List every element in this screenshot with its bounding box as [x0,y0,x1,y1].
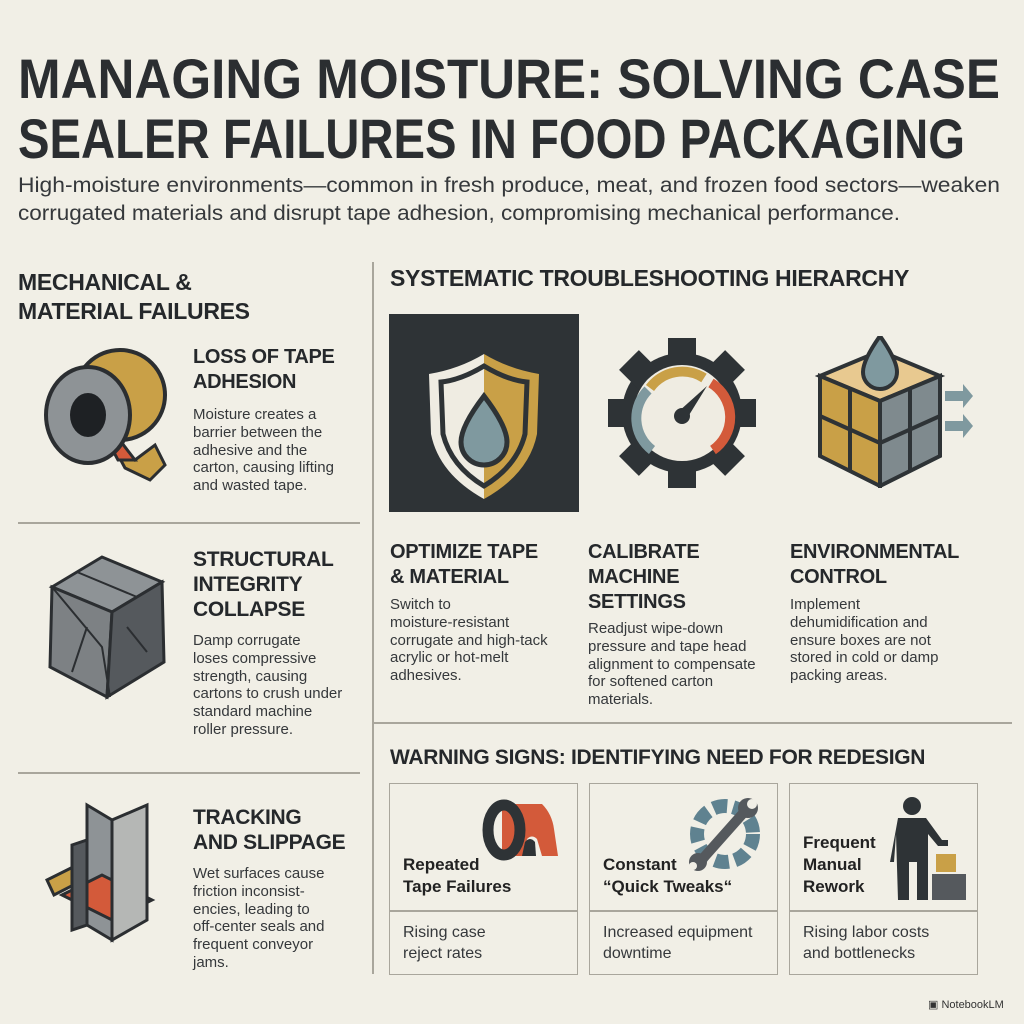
text: structural integrity collapse: roller pressure. [193,721,293,738]
heading: loss of tape adhesion [193,346,335,393]
text: card detail [403,924,486,962]
icon: tracking slippage [45,802,156,943]
icon: shield with drop [389,314,579,512]
text: card title [403,855,511,896]
text: loss of tape adhesion: and wasted tape. [193,477,307,494]
heading: structural integrity collapse: STRUCTURAL [193,548,333,571]
text: optimize tape: Switch to [390,596,451,613]
text: card detail: downtime [603,945,671,962]
text: calibrate: alignment to compensate [588,656,756,673]
heading: systematic troubleshooting hierarchy: SYSTEMATIC TROUBLESHOOTING HIERARCHY [390,265,909,291]
heading: loss of tape adhesion: LOSS OF TAPE [193,346,335,368]
text: card title [603,855,732,896]
text: card title [803,833,876,896]
heading: tracking and slippage [193,806,345,854]
heading: calibrate machine settings: MACHINE [588,566,679,588]
icon: tape roll [44,348,167,482]
text: environmental control: ensure boxes are not [790,632,931,649]
text: environmental control: packing areas. [790,667,888,684]
text: card title: Frequent [803,833,876,852]
heading: calibrate machine settings: CALIBRATE [588,541,699,563]
heading: optimize tape & material: OPTIMIZE TAPE [390,541,538,563]
text: structural integrity collapse: standard machine [193,703,312,720]
text: environmental control: stored in cold or damp [790,649,938,666]
icon: crushed box [48,555,166,700]
title [18,47,1000,170]
icon: cube with drop and arrows [815,336,973,488]
heading: environmental control [790,541,959,588]
text: optimize tape: acrylic or hot-melt [390,649,508,666]
text: card detail [803,924,929,962]
icon: tape roll red [482,800,558,860]
heading: calibrate machine settings [588,541,699,613]
text: loss of tape adhesion: adhesive and the [193,442,307,459]
subtitle [18,173,1000,225]
text: environmental control: dehumidification and [790,614,928,631]
heading: loss of tape adhesion: ADHESION [193,371,296,393]
text: tracking and slippage: off-center seals and [193,918,324,935]
text: card detail: reject rates [403,945,482,962]
text: structural integrity collapse: Damp corrugate [193,632,301,649]
subtitle: High-moisture environments—common in fresh produce, meat, and frozen food sectors—weaken [18,173,1000,197]
text: tracking and slippage [192,865,324,971]
text: optimize tape: moisture-resistant [390,614,509,631]
heading: warning signs: WARNING SIGNS: IDENTIFYING NEED FOR REDESIGN [390,746,925,769]
text: card detail: Increased equipment [603,924,752,941]
heading: mechanical & material failures [18,269,250,324]
text: structural integrity collapse: loses compressive [193,650,316,667]
text: loss of tape adhesion: barrier between the [193,424,322,441]
icon: gear and wrench [689,798,760,871]
text: card title: Rework [803,877,864,896]
text: environmental control [790,596,938,684]
card: frequent manual rework [789,783,978,975]
card: constant quick tweaks [589,783,778,975]
text: loss of tape adhesion: Moisture creates a [193,406,316,423]
text: tracking and slippage: frequent conveyor [193,936,313,953]
text: loss of tape adhesion: carton, causing lifting [193,459,334,476]
heading: environmental control: CONTROL [790,566,887,588]
text: calibrate: for softened carton [588,673,713,690]
text: tracking and slippage: Wet surfaces cause [193,865,324,882]
text: tracking and slippage: friction inconsist- [193,883,305,900]
heading: mechanical & material failures: MATERIAL FAILURES [18,298,250,324]
card: repeated tape failures [389,783,578,975]
heading: optimize tape & material: & MATERIAL [390,566,509,588]
text: card detail: and bottlenecks [803,945,915,962]
text: calibrate: materials. [588,691,653,708]
text: loss of tape adhesion [193,406,334,494]
heading: tracking and slippage: AND SLIPPAGE [193,831,345,854]
text: optimize tape: corrugate and high-tack [390,632,548,649]
text: calibrate [588,620,756,708]
text: card title: Manual [803,855,862,874]
text: card detail: Rising labor costs [803,924,929,941]
text: environmental control: Implement [790,596,860,613]
text: optimize tape [390,596,548,684]
text: card detail [603,924,752,962]
heading: structural integrity collapse: INTEGRITY [193,573,302,596]
text: tracking and slippage: jams. [193,954,229,971]
heading: tracking and slippage: TRACKING [193,806,301,829]
watermark: ▣ NotebookLM [928,999,1004,1011]
heading: environmental control: ENVIRONMENTAL [790,541,959,563]
heading: structural integrity collapse: COLLAPSE [193,598,305,621]
heading: optimize tape & material [390,541,538,588]
text: calibrate: Readjust wipe-down [588,620,723,637]
text: structural integrity collapse: strength, causing [193,668,307,685]
heading: mechanical & material failures: MECHANICAL & [18,269,192,295]
text: card title: Repeated [403,855,480,874]
text: card detail: Rising case [403,924,486,941]
text: tracking and slippage: encies, leading to [193,901,310,918]
text: card title: Constant [603,855,677,874]
subtitle: corrugated materials and disrupt tape adhesion, compromising mechanical performance. [18,201,900,225]
text: optimize tape: adhesives. [390,667,462,684]
text: card title: Tape Failures [403,877,511,896]
heading: calibrate machine settings: SETTINGS [588,591,686,613]
heading: structural integrity collapse [193,548,334,621]
icon: worker with boxes [890,797,966,900]
text: card title: “Quick Tweaks“ [603,877,732,896]
text: structural integrity collapse [193,632,342,738]
icon: gear gauge [608,338,756,488]
text: calibrate: pressure and tape head [588,638,746,655]
text: structural integrity collapse: cartons to crush under [193,685,342,702]
